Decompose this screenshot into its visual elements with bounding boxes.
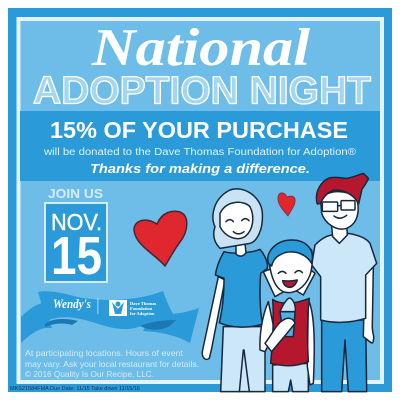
- family illustration: [202, 173, 377, 392]
- title: Adoption Night: ADOPTION NIGHT: [33, 70, 371, 112]
- donation band: [20, 111, 380, 181]
- icon: large red heart: [134, 211, 187, 266]
- sponsor ribbon: [21, 291, 199, 343]
- date month: NOV.: [51, 209, 102, 235]
- disclaimer text: © 2016 Quality Is Our Recipe, LLC.: [25, 370, 154, 379]
- logo: Dave Thomas Foundation text: Foundation: [130, 306, 153, 311]
- logo: Dave Thomas Foundation mark: [109, 300, 127, 316]
- date box: [45, 203, 107, 286]
- title: National: National: [91, 19, 310, 77]
- donation sentence: will be donated to the Dave Thomas Foundation for Adoption®: [43, 147, 357, 158]
- logo: Wendy's: Wendy's: [53, 296, 91, 311]
- child: [260, 240, 315, 392]
- print code line: MKS21584FMA Due Date: 11/15 Take down 11/15/16: [10, 386, 140, 392]
- logo: Dave Thomas Foundation text: Dave Thomas: [130, 301, 157, 306]
- father: [312, 173, 377, 392]
- disclaimer text: may vary. Ask your local restaurant for details.: [25, 360, 199, 369]
- thanks line: Thanks for making a difference.: [90, 161, 310, 176]
- icon: small red heart: [278, 193, 295, 216]
- headline: 15% of your purchase: 15% OF YOUR PURCHASE: [50, 117, 348, 143]
- join us label: JOIN US: [48, 187, 103, 201]
- disclaimer text: At participating locations. Hours of event: [25, 349, 184, 358]
- logo: Dave Thomas Foundation text: for Adoption: [130, 311, 155, 316]
- mother: [202, 189, 268, 392]
- date day: 15: [51, 226, 102, 286]
